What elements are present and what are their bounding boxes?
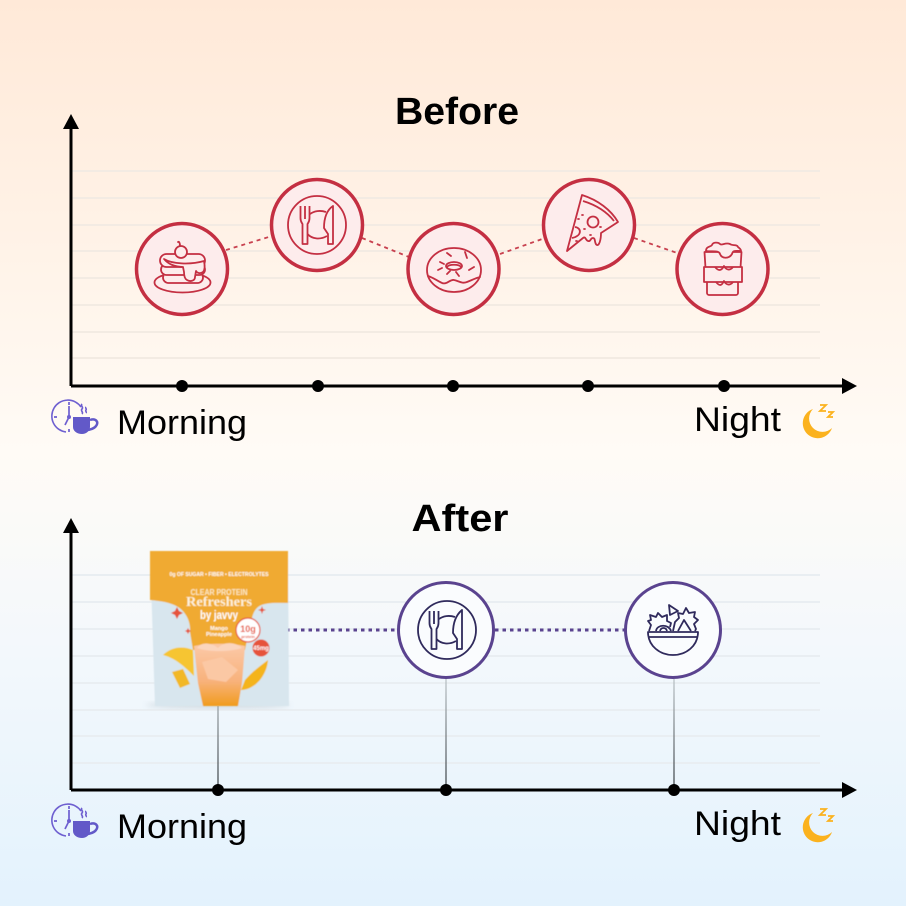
before chart axes [63,114,857,394]
icon: pancakes [136,224,228,314]
icon: morning clock and cup [52,400,97,434]
label: Morning, after: Morning [117,808,247,846]
product: refreshers pouch: 0g OF SUGAR • FIBER • ELECTROLYTES [170,572,269,578]
dotted connectors: after [286,628,625,632]
icon: plate with cutlery, after [398,582,494,678]
label: Morning: Morning [117,404,247,442]
label: Night: Night [694,401,782,439]
product: refreshers pouch: 45mg [253,646,269,652]
icon: plate with cutlery [272,180,362,270]
product: refreshers pouch: Refreshers [186,595,253,610]
title: After: After [412,498,509,540]
icon: stacked takeout boxes [677,224,768,314]
icon: night moon, after [803,809,833,842]
icon: pizza slice [544,180,634,270]
icon: morning clock and cup, after [52,804,97,838]
product: refreshers pouch: by javvy [200,608,238,622]
icon: salad bowl [626,582,720,678]
product: refreshers pouch: Mango [210,626,228,632]
label: Night, after: Night [694,805,782,843]
icon: night moon [803,405,833,438]
product: refreshers pouch [146,551,290,708]
title: Before: Before [395,91,519,133]
product: refreshers pouch: CLEAR PROTEIN [190,588,248,597]
after chart axes [63,518,857,798]
dotted connectors: before [226,236,680,257]
product: refreshers pouch: protein [241,634,255,639]
icon: donut [408,224,499,314]
product: refreshers pouch: 10g [240,624,256,634]
product: refreshers pouch: Pineapple [206,632,232,638]
